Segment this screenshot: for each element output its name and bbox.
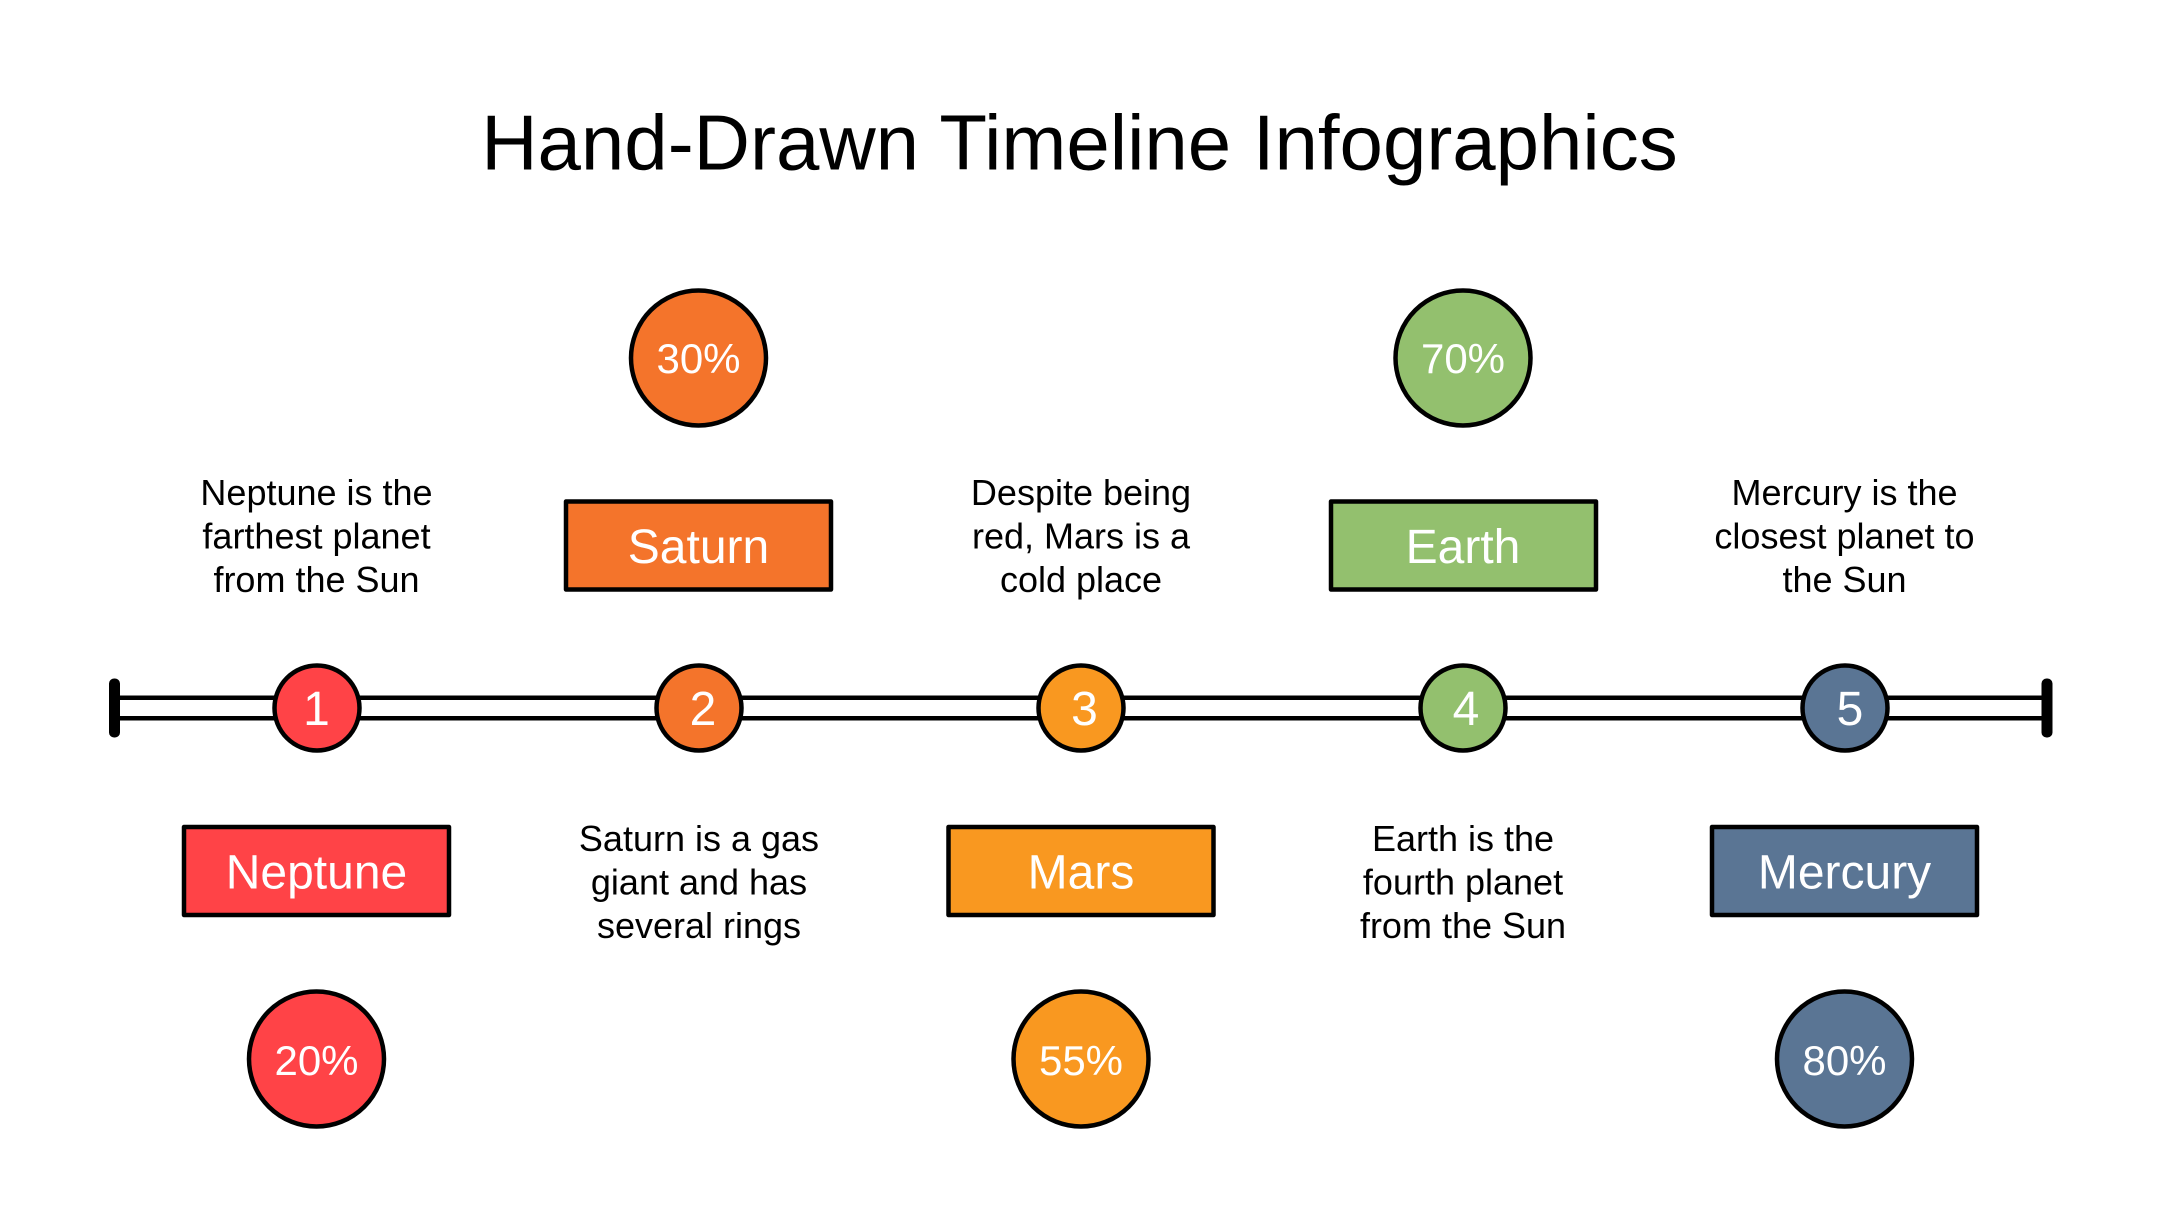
percentage: 70%: 70% [1421,335,1505,382]
title: Hand-Drawn Timeline Infographics [481,98,1678,186]
description: Mercury: Mercury is the [1731,472,1958,513]
marker 1: 1 [303,683,330,736]
description: Earth: Earth is the [1372,818,1554,859]
description: Saturn: Saturn is a gas [579,818,819,859]
description: Neptune: Neptune is the [200,472,433,513]
label: Earth [1331,502,1596,590]
marker 5 [1802,666,1888,750]
description: Neptune: farthest planet [202,515,431,556]
description: Earth: from the Sun [1360,905,1566,946]
description: Mercury: the Sun [1782,559,1907,600]
marker 2 [656,666,742,750]
label: Neptune: Neptune [226,846,407,900]
label: Saturn [566,502,831,590]
percentage: 20% [249,992,384,1126]
label: Earth: Earth [1406,521,1520,574]
marker 4 [1420,666,1506,750]
description: Mars: cold place [1000,559,1162,600]
step 5: Mercury [1712,472,1977,1126]
step 2: Saturn [566,290,831,946]
description: Neptune: from the Sun [213,559,420,600]
description: Earth: fourth planet [1363,861,1563,902]
percentage: 70% [1396,290,1530,426]
description: Saturn: several rings [597,905,801,946]
marker 2: 2 [690,683,716,736]
percentage: 30% [631,290,766,426]
percentage: 80% [1777,992,1912,1126]
marker 3 [1038,666,1124,750]
step 1: Neptune [184,472,449,1126]
description: Mercury: closest planet to [1714,515,1975,556]
label: Saturn: Saturn [628,521,769,574]
step 4: Earth [1331,290,1596,946]
percentage: 55% [1014,992,1148,1126]
percentage: 55%: 55% [1039,1037,1123,1084]
percentage: 80%: 80% [1802,1037,1887,1084]
label: Mars: Mars [1028,846,1134,900]
description: Saturn: giant and has [591,861,807,902]
percentage: 30%: 30% [656,335,741,382]
label: Mars [948,827,1214,915]
marker 5: 5 [1837,683,1863,736]
timeline bar [109,678,2052,738]
label: Neptune [184,827,449,915]
step 3: Mars [948,472,1214,1126]
marker 3: 3 [1071,683,1098,736]
marker 4: 4 [1453,683,1479,736]
label: Mercury [1712,827,1977,915]
percentage: 20%: 20% [274,1037,359,1084]
marker 1 [274,666,360,750]
label: Mercury: Mercury [1758,846,1931,900]
description: Mars: Despite being [971,472,1191,513]
description: Mars: red, Mars is a [972,515,1191,556]
